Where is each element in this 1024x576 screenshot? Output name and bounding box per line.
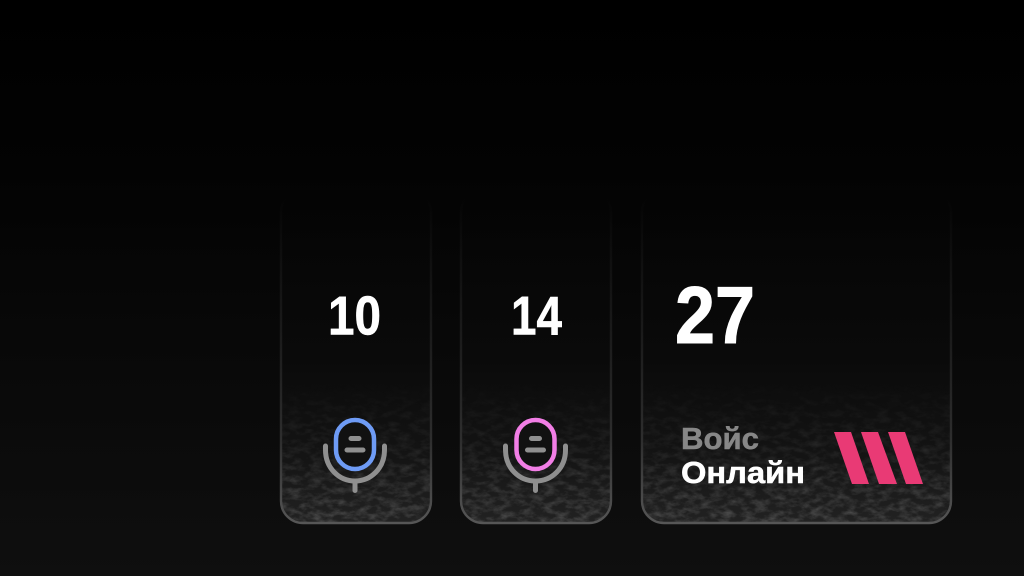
- number: 10: 10: [328, 284, 381, 346]
- icon: pink microphone: [506, 420, 566, 490]
- panel: card 27 with logo: [640, 248, 952, 524]
- label: Онлайн: Онлайн: [681, 455, 805, 490]
- label: Войс: Войс: [681, 421, 759, 456]
- number: 14: 14: [511, 284, 562, 346]
- logo: three pink bars: [834, 432, 923, 484]
- panel: card 14: [460, 248, 612, 524]
- panel: card 10: [280, 248, 432, 524]
- icon: blue microphone: [326, 420, 384, 490]
- number: 27: 27: [675, 271, 755, 361]
